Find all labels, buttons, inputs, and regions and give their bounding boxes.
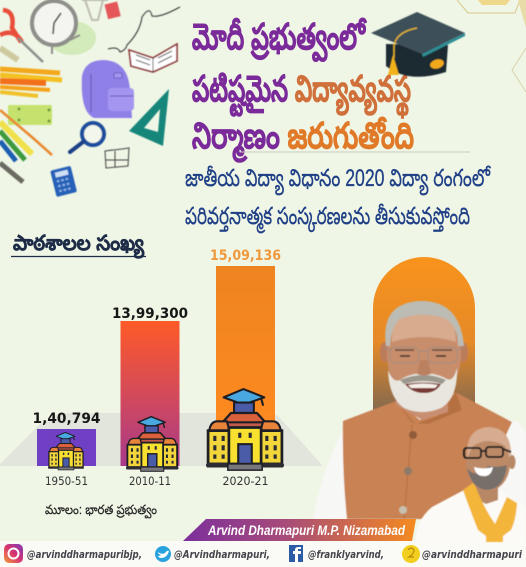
portrait: Modi — [313, 301, 526, 519]
icon: squiggle line — [108, 7, 180, 52]
bar: 2020-21 — [206, 248, 284, 488]
glasses — [384, 347, 464, 363]
footer: social handles — [4, 544, 522, 563]
icon: sharpener — [104, 2, 121, 19]
neck and ears — [396, 385, 448, 420]
bar: 2010-11: 13,99,300 — [112, 306, 188, 322]
bar: 1950-51: 1950-51 — [45, 474, 88, 488]
arch behind portrait — [373, 257, 475, 410]
icon: binder clip — [82, 0, 108, 20]
white kurta — [313, 412, 526, 519]
title: పటిష్టమైన విద్యావ్యవస్థ — [192, 68, 411, 119]
handle: twitter: @Arvindharmapuri, — [174, 548, 270, 561]
handle: facebook: @franklyarvind, — [308, 548, 384, 561]
portrait: Arvind — [415, 427, 526, 542]
brows and eyes — [395, 349, 452, 351]
banner — [183, 519, 416, 541]
title: మోదీ ప్రభుత్వంలో — [192, 16, 367, 62]
icon: magnifier — [70, 123, 104, 152]
grey platform — [0, 413, 322, 466]
icon: set square — [129, 89, 169, 146]
bar: 1950-51 — [32, 411, 101, 488]
nose — [417, 360, 431, 376]
title — [192, 16, 414, 163]
icon: scissors — [0, 10, 43, 62]
bar: 2010-11 — [112, 306, 188, 488]
footer strip — [0, 541, 526, 567]
glasses — [464, 447, 511, 458]
subtitle — [185, 165, 491, 234]
beard — [467, 465, 507, 490]
icon: graduation cap — [371, 12, 465, 77]
icon: twitter — [155, 546, 171, 562]
bar chart — [0, 248, 322, 488]
bar: 1950-51: 1,40,794 — [32, 411, 101, 427]
vest — [343, 392, 512, 519]
divider — [240, 151, 470, 153]
face — [387, 304, 461, 404]
title: నిర్మాణం జరుగుతోంది — [192, 115, 414, 163]
neck — [474, 480, 498, 504]
icon: calculator — [50, 166, 77, 197]
icon: koo — [402, 545, 420, 563]
icon: ruler — [8, 105, 52, 125]
icon: facebook — [289, 545, 303, 562]
hair — [385, 301, 464, 346]
white shirt — [415, 490, 526, 542]
bar: 2020-21: 15,09,136 — [210, 248, 281, 264]
beard — [388, 368, 457, 412]
icon: brushes and pens — [0, 110, 52, 182]
icon: alarm clock — [32, 1, 96, 55]
icon: backpack — [82, 60, 134, 118]
icon: wireframe cube — [105, 148, 129, 168]
banner: Arvind Dharmapuri M.P. Nizamabad — [207, 523, 406, 538]
head — [466, 435, 510, 491]
bar: 2010-11: 2010-11 — [129, 474, 171, 488]
decorative hexagons top right — [457, 0, 526, 92]
icon: open book — [129, 44, 177, 72]
yellow scarf — [463, 482, 517, 542]
chart heading: పాఠశాలల సంఖ్య — [13, 232, 145, 259]
decorative school supplies — [0, 0, 180, 197]
handle: instagram: @arvinddharmapuribjp, — [27, 548, 142, 561]
icon: pencils — [0, 69, 62, 96]
icon: instagram — [4, 544, 23, 563]
source note: మూలం: భారత ప్రభుత్వం — [45, 502, 157, 519]
bar: 2020-21: 2020-21 — [222, 474, 268, 488]
